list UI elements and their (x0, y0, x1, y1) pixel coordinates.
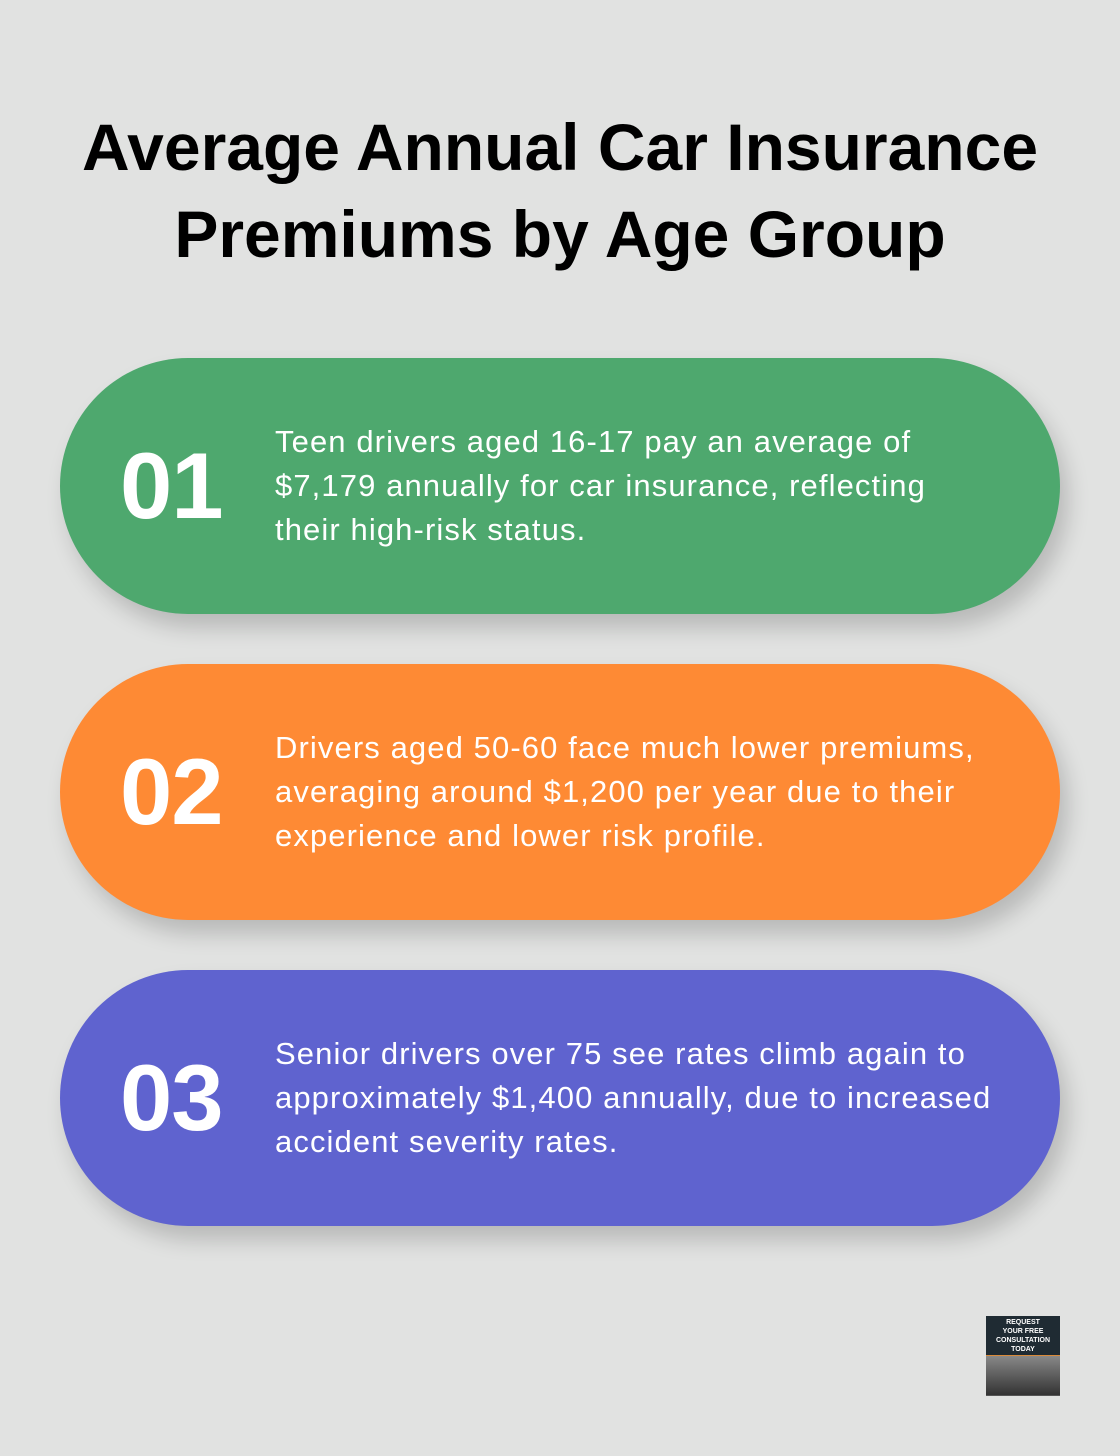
logo: consultation badge: YOUR FREE (1003, 1328, 1043, 1335)
text: drivers 50-60: experience and lower risk profile. (275, 818, 766, 853)
logo: consultation badge (986, 1316, 1060, 1396)
title (82, 110, 1038, 271)
text: teen drivers: Teen drivers aged 16-17 pay an average of (275, 424, 911, 459)
logo: consultation badge: REQUEST (1006, 1319, 1040, 1326)
panel: teen drivers (60, 358, 1060, 614)
panel: senior drivers (60, 970, 1060, 1226)
text: teen drivers (275, 424, 926, 547)
number 02: 02 (120, 739, 223, 844)
title: Average Annual Car Insurance (82, 110, 1038, 184)
text: teen drivers: $7,179 annually for car insurance, reflecting (275, 468, 926, 503)
text: drivers 50-60: averaging around $1,200 per year due to their (275, 774, 955, 809)
text: drivers 50-60: Drivers aged 50-60 face much lower premiums, (275, 730, 975, 765)
text: drivers 50-60 (275, 730, 975, 853)
number 03: 03 (120, 1045, 223, 1150)
number 01: 01 (120, 433, 223, 538)
text: senior drivers: approximately $1,400 annually, due to increased (275, 1080, 991, 1115)
title: Premiums by Age Group (174, 197, 946, 271)
logo: consultation badge: CONSULTATION (996, 1337, 1050, 1344)
text: senior drivers (275, 1036, 991, 1159)
text: teen drivers: their high-risk status. (275, 512, 586, 547)
panel: drivers 50-60 (60, 664, 1060, 920)
logo: consultation badge: TODAY (1011, 1346, 1035, 1353)
text: senior drivers: Senior drivers over 75 see rates climb again to (275, 1036, 966, 1071)
text: senior drivers: accident severity rates. (275, 1124, 618, 1159)
